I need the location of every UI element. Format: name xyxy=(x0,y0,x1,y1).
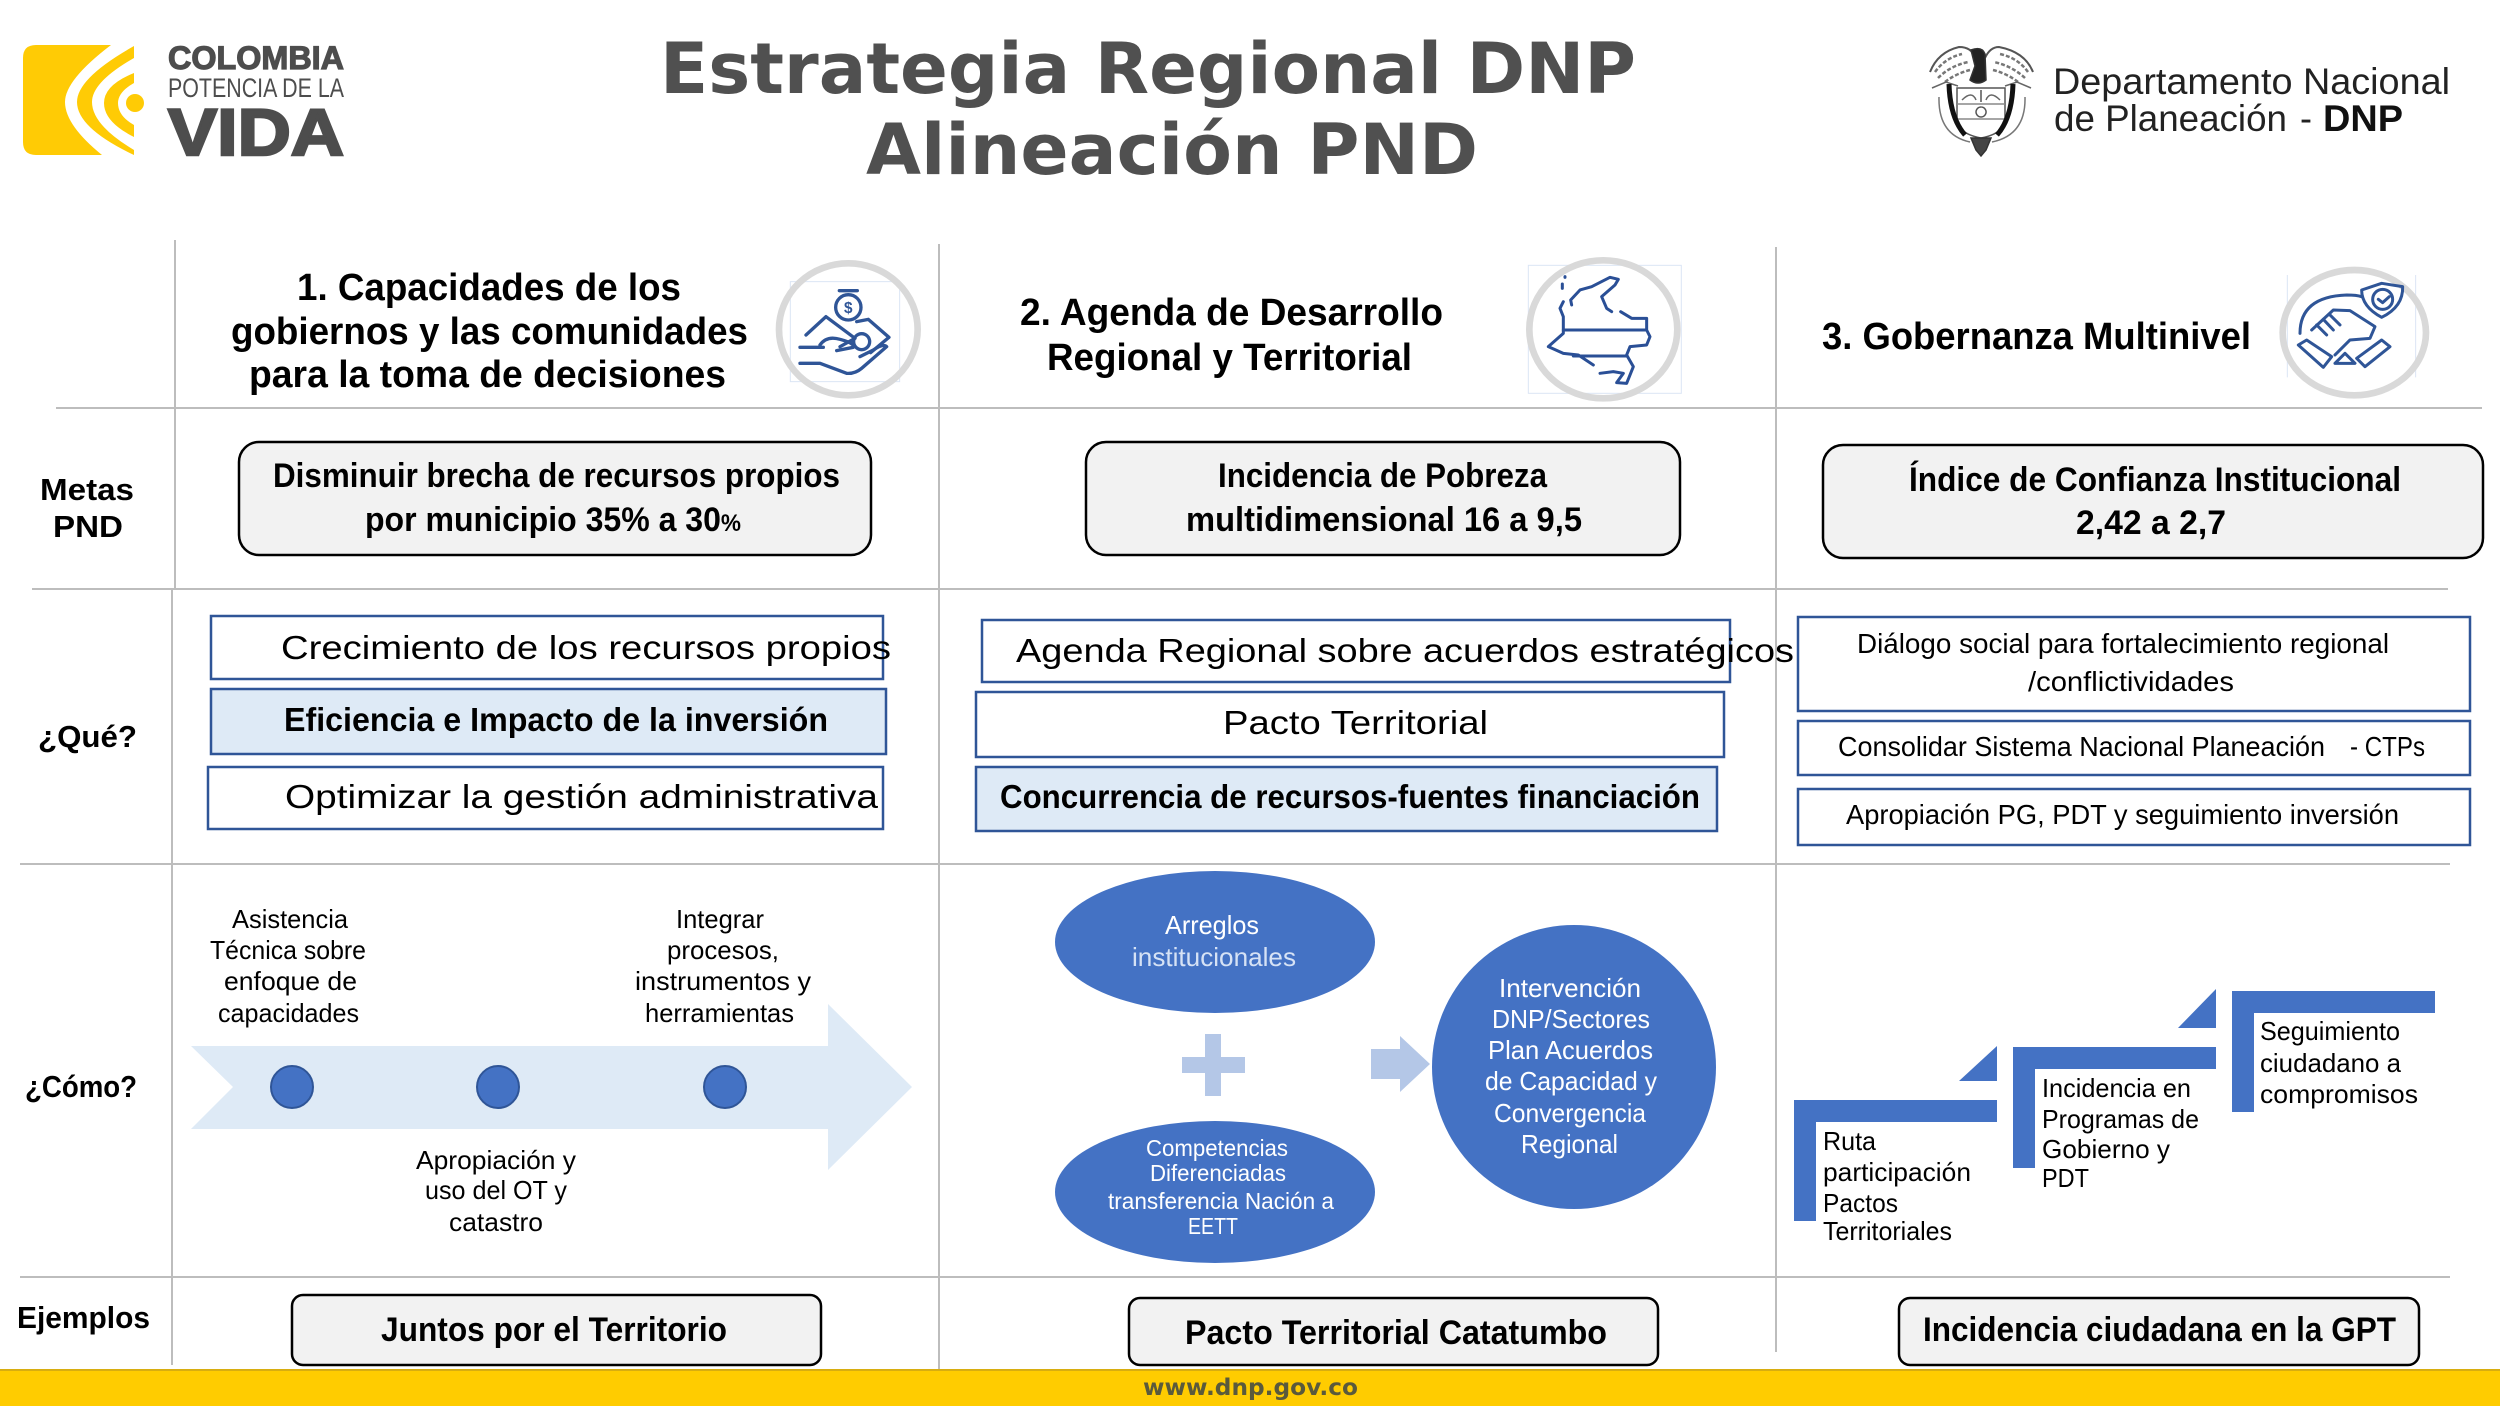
label: Metas: Metas xyxy=(40,472,134,507)
que box: crecimiento xyxy=(211,616,891,679)
text: apropiacion xyxy=(416,1145,576,1237)
step 2: incidencia: Programas de xyxy=(2042,1104,2199,1134)
meta box 3: 2,42 a 2,7 xyxy=(2076,504,2226,542)
footer bar: www.dnp.gov.co xyxy=(1143,1375,1358,1401)
step 3: seguimiento: compromisos xyxy=(2260,1079,2418,1109)
label: ¿Qué?: ¿Qué? xyxy=(38,719,137,754)
que box: concurrencia: Concurrencia de recursos-fuentes financiación xyxy=(1000,778,1700,815)
logo: Departamento Nacional de Planeación: - xyxy=(2300,98,2312,139)
step 1: ruta participacion: participación xyxy=(1823,1157,1971,1187)
que box: concurrencia xyxy=(976,767,1717,831)
meta box 3 xyxy=(1823,445,2483,558)
step 3: seguimiento: Seguimiento xyxy=(2260,1016,2400,1046)
panel: column 3 gobernanza xyxy=(1794,270,2483,1365)
que box: dialogo social xyxy=(1798,617,2470,711)
example box 1 xyxy=(292,1295,821,1365)
que box: crecimiento: Crecimiento de los recursos propios xyxy=(281,629,891,666)
meta box 3: Índice de Confianza Institucional xyxy=(1909,461,2401,499)
title xyxy=(660,28,1636,191)
heading: capacidades xyxy=(231,267,748,396)
ellipse: competencias xyxy=(1055,1121,1375,1263)
heading: capacidades: 1. Capacidades de los xyxy=(297,267,681,309)
que box: apropiacion: Apropiación PG, PDT y seguimiento inversión xyxy=(1846,799,2399,830)
icon: plus xyxy=(1182,1034,1245,1096)
text: apropiacion: Apropiación y xyxy=(416,1145,576,1175)
footer bar xyxy=(0,1369,2500,1406)
que box: eficiencia: Eficiencia e Impacto de la inversión xyxy=(284,701,828,738)
heading: agenda xyxy=(1020,292,1443,379)
que box: pacto territorial: Pacto Territorial xyxy=(1223,704,1488,741)
que box: pacto territorial xyxy=(976,692,1724,757)
title: Estrategia Regional DNP xyxy=(660,28,1636,110)
text: asistencia tecnica: capacidades xyxy=(218,998,359,1028)
text: apropiacion: catastro xyxy=(449,1207,543,1237)
icon: coat of arms xyxy=(1930,47,2033,156)
heading: gobernanza: 3. Gobernanza Multinivel xyxy=(1822,316,2251,358)
step 2: incidencia: Incidencia en xyxy=(2042,1073,2191,1103)
text: asistencia tecnica: enfoque de xyxy=(224,966,357,996)
circle: intervencion: de Capacidad y xyxy=(1485,1066,1657,1096)
meta box 2: Incidencia de Pobreza xyxy=(1218,457,1548,495)
ellipse: competencias: Competencias xyxy=(1146,1135,1288,1161)
example box 2 xyxy=(1129,1298,1658,1365)
circle: intervencion: Plan Acuerdos xyxy=(1488,1035,1653,1065)
que box: apropiacion xyxy=(1798,789,2470,845)
text: asistencia tecnica: Asistencia xyxy=(232,904,349,934)
step 1: ruta participacion xyxy=(1794,1046,1997,1246)
que box: consolidar xyxy=(1798,721,2470,775)
panel: column 1 capacidades xyxy=(191,263,918,1365)
meta box 1: Disminuir brecha de recursos propios xyxy=(273,457,840,495)
step 1: ruta participacion: Territoriales xyxy=(1823,1216,1952,1246)
logo: Colombia Potencia de la Vida xyxy=(23,40,344,169)
logo: Departamento Nacional de Planeación xyxy=(1930,47,2450,156)
row labels xyxy=(17,472,150,1335)
icon: hand with money xyxy=(779,263,918,395)
logo: Colombia Potencia de la Vida: VIDA xyxy=(168,95,344,169)
ellipse: competencias: EETT xyxy=(1188,1213,1238,1239)
logo: Departamento Nacional de Planeación: de Planeación xyxy=(2054,98,2287,139)
que box: agenda regional xyxy=(982,620,1794,682)
step 2: incidencia: Gobierno y xyxy=(2042,1134,2170,1164)
circle: intervencion xyxy=(1432,925,1716,1209)
label: ¿Cómo?: ¿Cómo? xyxy=(25,1069,137,1104)
meta box 1 xyxy=(239,442,871,555)
ellipse: competencias: transferencia Nación a xyxy=(1108,1188,1334,1214)
step 3: seguimiento: ciudadano a xyxy=(2260,1048,2402,1078)
icon: hand with money: $ xyxy=(844,300,853,317)
example box 3: Incidencia ciudadana en la GPT xyxy=(1923,1311,2396,1349)
example box 2: Pacto Territorial Catatumbo xyxy=(1185,1314,1607,1352)
text: integrar procesos: herramientas xyxy=(645,998,794,1028)
heading: agenda: Regional y Territorial xyxy=(1047,337,1412,379)
arrow: to intervention xyxy=(1371,1036,1430,1092)
arrow with milestones xyxy=(191,1004,912,1170)
step 3: seguimiento xyxy=(2232,991,2435,1112)
text: integrar procesos: procesos, xyxy=(667,935,779,965)
meta box 1: por municipio 35% a 30% xyxy=(365,501,741,539)
step 1: ruta participacion: Ruta xyxy=(1823,1126,1877,1156)
text: integrar procesos: Integrar xyxy=(676,904,764,934)
example box 1: Juntos por el Territorio xyxy=(381,1311,727,1349)
circle: intervencion: Intervención xyxy=(1499,973,1641,1003)
que box: dialogo social: /conflictividades xyxy=(2028,666,2234,697)
ellipse: competencias: Diferenciadas xyxy=(1150,1160,1286,1186)
text: integrar procesos: instrumentos y xyxy=(635,966,811,996)
example box 3 xyxy=(1899,1298,2419,1365)
ellipse: arreglos institucionales: Arreglos xyxy=(1165,910,1259,940)
heading: capacidades: para la toma de decisiones xyxy=(249,354,726,396)
text: asistencia tecnica: Técnica sobre xyxy=(210,935,366,965)
circle: intervencion: Convergencia xyxy=(1494,1098,1647,1128)
text: apropiacion: uso del OT y xyxy=(425,1175,567,1205)
ellipse: arreglos institucionales: institucionales xyxy=(1132,942,1296,972)
heading: agenda: 2. Agenda de Desarrollo xyxy=(1020,292,1443,334)
text: asistencia tecnica xyxy=(210,904,366,1028)
logo: Departamento Nacional de Planeación: Departamento Nacional xyxy=(2053,61,2450,102)
heading: capacidades: gobiernos y las comunidades xyxy=(231,311,748,353)
meta box 2 xyxy=(1086,442,1680,555)
meta box 2: multidimensional 16 a 9,5 xyxy=(1186,501,1582,539)
title: Alineación PND xyxy=(866,109,1478,191)
circle: intervencion: DNP/Sectores xyxy=(1492,1004,1650,1034)
que box: optimizar: Optimizar la gestión administrativa xyxy=(285,778,879,815)
que box: dialogo social: Diálogo social para fortalecimiento regional xyxy=(1857,628,2389,659)
step 2: incidencia xyxy=(2013,989,2216,1193)
label: PND: PND xyxy=(53,509,123,544)
text: integrar procesos xyxy=(635,904,811,1028)
que box: agenda regional: Agenda Regional sobre acuerdos estratégicos xyxy=(1016,632,1794,669)
que box: optimizar xyxy=(208,767,883,829)
circle: intervencion: Regional xyxy=(1521,1129,1618,1159)
icon: handshake xyxy=(2283,270,2426,395)
panel: column 2 agenda xyxy=(976,260,1794,1365)
que box: consolidar: Consolidar Sistema Nacional Planeación xyxy=(1838,731,2325,762)
logo: Colombia Potencia de la Vida: COLOMBIA xyxy=(168,40,344,76)
icon: Colombia map xyxy=(1528,260,1681,398)
step 1: ruta participacion: Pactos xyxy=(1823,1188,1898,1218)
step 2: incidencia: PDT xyxy=(2042,1163,2089,1193)
logo: Colombia Potencia de la Vida: POTENCIA DE LA xyxy=(168,73,344,103)
que box: consolidar: - CTPs xyxy=(2350,731,2425,762)
ellipse: arreglos institucionales xyxy=(1055,871,1375,1013)
label: Ejemplos: Ejemplos xyxy=(17,1300,150,1335)
logo: Departamento Nacional de Planeación: DNP xyxy=(2323,98,2403,139)
que box: eficiencia xyxy=(211,689,886,754)
